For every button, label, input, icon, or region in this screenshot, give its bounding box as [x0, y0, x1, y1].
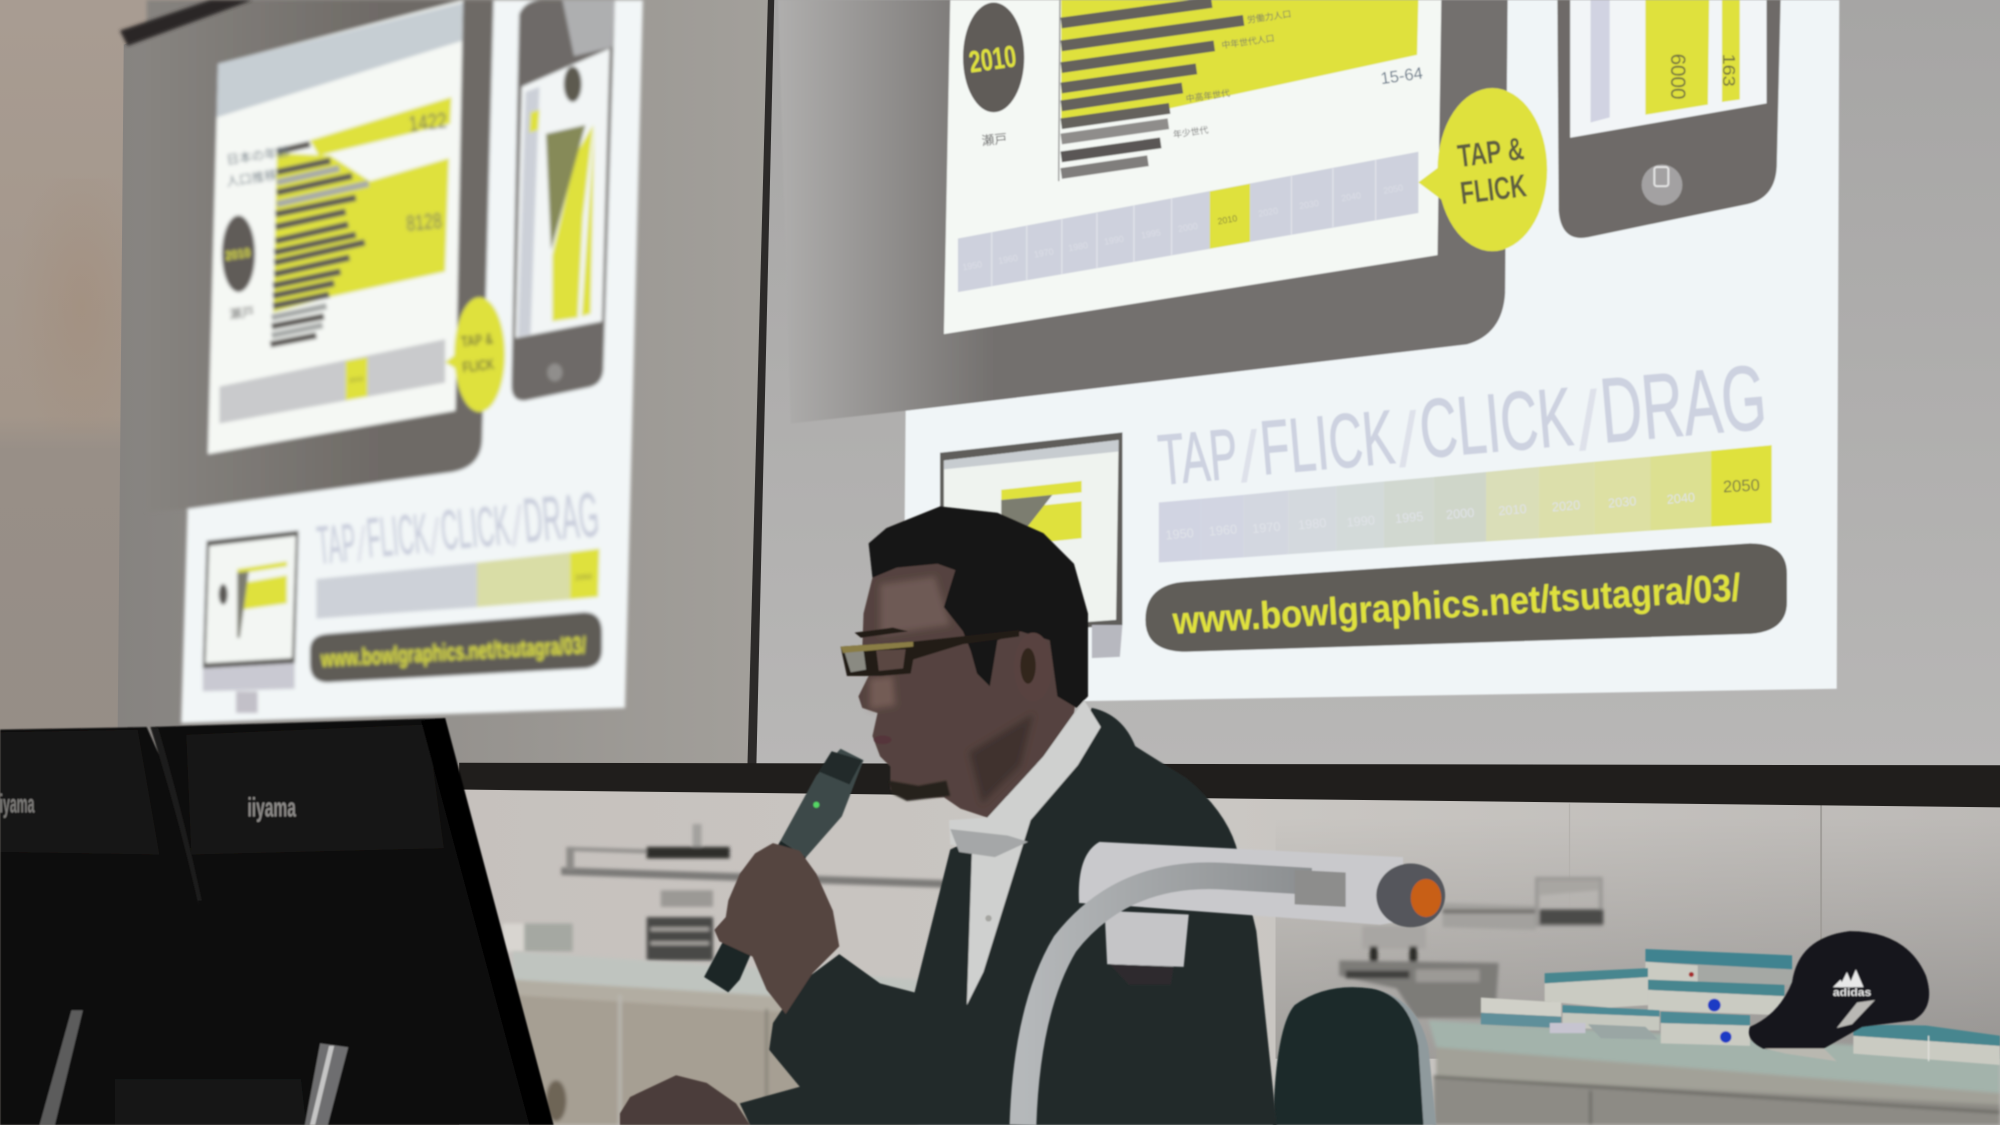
back counter right	[1429, 1020, 2000, 1125]
tap and flick bubble	[445, 297, 505, 412]
smartphone: 163	[1719, 54, 1739, 87]
url pill	[310, 612, 602, 682]
slide background	[903, 0, 1839, 704]
monitors	[0, 718, 554, 1125]
jacket	[740, 708, 1277, 1125]
tablet body	[147, 0, 494, 511]
chart title: 日本の年齢	[225, 144, 291, 168]
gesture heading: /	[426, 508, 444, 566]
browser bar	[217, 3, 463, 117]
small items on counter	[1550, 1023, 1658, 1040]
year timeline: 1970	[1033, 246, 1054, 260]
shirt	[949, 700, 1101, 1005]
chart annotations: 年少世代	[1172, 124, 1209, 140]
smartphone: 6000	[1666, 54, 1691, 99]
year timeline: 1980	[1067, 240, 1089, 253]
desktop thumbnail	[203, 531, 298, 713]
left slide	[147, 0, 643, 723]
gesture timeline: 2030	[1607, 493, 1637, 511]
hand	[714, 843, 839, 1014]
gesture heading: TAP	[1155, 414, 1241, 501]
gesture timeline: 1995	[1394, 509, 1424, 526]
right monitor	[115, 718, 554, 1125]
yellow data areas	[273, 97, 452, 312]
gesture heading	[315, 480, 602, 576]
url pill: www.bowlgraphics.net/tsutagra/03/	[1171, 566, 1742, 643]
tap and flick bubble: TAP &	[460, 331, 494, 351]
year circle: 2010	[967, 39, 1018, 80]
box	[1645, 949, 1792, 985]
year timeline	[219, 339, 445, 423]
small box on counter	[503, 923, 573, 952]
baseball cap	[1749, 931, 1929, 1061]
year timeline: 1960	[997, 253, 1019, 266]
lens	[1110, 964, 1173, 985]
year timeline: 1950	[962, 259, 983, 272]
year timeline: 1990	[1103, 234, 1124, 247]
gesture timeline: 1980	[1297, 515, 1327, 532]
year timeline: 2040	[1340, 190, 1362, 204]
gesture heading: CLICK	[1416, 370, 1576, 476]
gesture heading: TAP	[315, 514, 358, 576]
gesture heading: FLICK	[364, 501, 431, 569]
box	[1481, 997, 1561, 1028]
gesture heading: /	[1573, 373, 1604, 468]
chart title: 人口推移	[225, 167, 278, 189]
glasses	[841, 630, 1019, 676]
gesture timeline	[316, 548, 599, 619]
right rail and bracket	[1443, 879, 1603, 930]
year timeline	[958, 152, 1418, 292]
screen bottom bar	[459, 763, 2000, 807]
slide background	[181, 0, 643, 723]
age label: 15-64	[1379, 63, 1424, 88]
url pill: www.bowlgraphics.net/tsutagra/03/	[320, 632, 587, 673]
back counter left	[513, 952, 918, 1125]
chart title: 瀬戸	[228, 304, 255, 322]
gesture heading: DRAG	[1596, 346, 1770, 463]
metal stand	[1339, 926, 1499, 1018]
population bars	[270, 144, 369, 344]
tap and flick bubble: TAP &	[1456, 130, 1526, 174]
smartphone	[511, 0, 615, 401]
gesture timeline: 2020	[1551, 497, 1581, 514]
arm	[1023, 876, 1311, 1125]
hair	[869, 506, 1088, 708]
stacked boxes	[1481, 949, 2000, 1065]
gesture timeline: 2000	[1445, 505, 1475, 522]
screen seam	[747, 0, 774, 765]
lower hand	[620, 1075, 750, 1125]
tap and flick bubble	[1418, 88, 1547, 251]
chair back	[1273, 987, 1436, 1125]
year timeline: 1995	[1140, 227, 1161, 240]
gesture timeline: 2010	[1498, 501, 1527, 518]
document camera	[1023, 842, 1445, 1125]
shirt button	[985, 915, 992, 922]
year timeline: 2020	[1258, 206, 1279, 219]
population bars	[1061, 3, 1244, 173]
shirt collar shadow	[950, 829, 1028, 857]
gesture timeline: 1950	[1165, 525, 1194, 543]
baseball cap: adidas	[1833, 987, 1871, 999]
box	[1545, 968, 1648, 1008]
chart axis	[1059, 0, 1060, 181]
yellow data area	[1061, 0, 1418, 124]
gesture heading: /	[353, 517, 370, 572]
chart numbers	[405, 107, 448, 236]
year circle	[222, 216, 255, 292]
chart annotations: 中年世代人口	[1221, 32, 1275, 50]
forehead and nose highlight	[870, 577, 1033, 804]
gesture heading: FLICK	[1257, 395, 1398, 491]
top left screen rail	[120, 0, 253, 46]
chart numbers: 8128	[405, 208, 443, 236]
camera body	[1079, 842, 1403, 925]
url pill	[1145, 543, 1787, 652]
left monitor	[0, 727, 277, 1125]
beard	[889, 781, 950, 801]
tablet body	[778, 0, 1508, 423]
year circle: 2010	[224, 245, 251, 263]
left rail	[561, 824, 944, 960]
gesture heading: /	[1393, 397, 1423, 484]
gesture timeline: 1960	[1208, 521, 1238, 539]
year timeline: 2050	[1383, 183, 1404, 196]
tap and flick bubble: FLICK	[1458, 167, 1528, 211]
year timeline: 2010	[349, 376, 364, 385]
camera neck	[1105, 911, 1189, 967]
year timeline: 2000	[1177, 221, 1198, 234]
left slide: DRAG	[521, 480, 602, 556]
box	[1648, 980, 1784, 1015]
right slide	[778, 0, 1839, 704]
desktop thumbnail	[940, 432, 1122, 658]
chart title	[225, 144, 291, 322]
chart annotations	[1172, 8, 1292, 140]
tablet screen	[944, 0, 1441, 334]
ear	[1014, 633, 1052, 702]
right projection screen	[753, 0, 2000, 768]
gesture heading: /	[507, 494, 527, 558]
gesture timeline: 1990	[1346, 512, 1375, 530]
chart annotations: 中高年世代	[1185, 87, 1231, 104]
back wall rails and brackets	[503, 824, 1603, 1018]
microphone	[704, 749, 864, 992]
gesture timeline: 1970	[1252, 519, 1281, 536]
box	[1562, 1005, 1659, 1031]
gesture timeline	[1159, 445, 1772, 562]
left projection screen	[117, 0, 770, 765]
tap and flick bubble: FLICK	[462, 356, 495, 376]
gesture timeline: 2040	[1666, 489, 1696, 507]
box	[1853, 1024, 2000, 1065]
orange button	[1411, 879, 1441, 917]
gesture heading: CLICK	[438, 493, 512, 562]
neck and face	[858, 561, 1084, 818]
tablet screen	[208, 0, 463, 454]
smartphone	[1557, 0, 1781, 238]
year timeline: 2030	[1298, 198, 1320, 211]
presenter	[620, 506, 1277, 1125]
end cap ring	[1376, 864, 1445, 927]
gesture heading: /	[1235, 417, 1263, 498]
gesture heading	[1155, 346, 1770, 501]
mouth	[874, 735, 892, 744]
chart annotations: 労働力人口	[1246, 8, 1292, 25]
right monitor: iiyama	[247, 792, 297, 822]
year timeline: 2010	[1217, 213, 1238, 226]
chart numbers: 1422	[407, 107, 448, 136]
eyebrow	[855, 628, 908, 638]
arm collar	[1295, 870, 1346, 907]
box	[1661, 1011, 1750, 1046]
year circle	[963, 3, 1024, 112]
gesture timeline: 2050	[1722, 475, 1760, 496]
gesture timeline: 2050	[575, 572, 592, 582]
region label: 瀬戸	[981, 131, 1008, 148]
